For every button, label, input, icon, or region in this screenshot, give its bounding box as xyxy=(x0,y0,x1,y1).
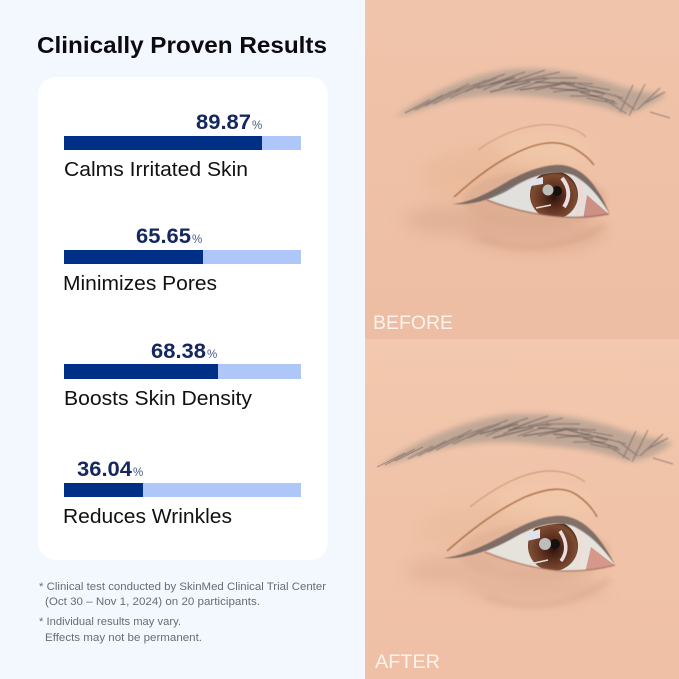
label: after: AFTER xyxy=(375,651,440,673)
result: minimizes pores xyxy=(63,225,301,295)
eyelid creases xyxy=(447,471,597,551)
value: 65.65%: % xyxy=(192,234,202,246)
eyebrow xyxy=(395,69,670,118)
bar: 89.87 percent xyxy=(64,136,301,150)
bar: 68.38 percent xyxy=(64,364,301,379)
footnotes: (Oct 30 – Nov 1, 2024) on 20 participants. xyxy=(45,596,260,608)
value: 65.65%: 65.65 xyxy=(136,225,191,248)
label: calms irritated skin: Calms Irritated Skin xyxy=(64,159,248,181)
footnotes: Effects may not be permanent. xyxy=(45,632,202,644)
eye xyxy=(443,516,617,581)
bar: 65.65 percent xyxy=(64,250,301,264)
value: 89.87%: % xyxy=(252,120,262,132)
result: reduces wrinkles xyxy=(63,458,301,528)
title: Clinically Proven Results xyxy=(37,32,327,58)
footnotes xyxy=(39,581,326,644)
value: 89.87%: 89.87 xyxy=(196,111,251,134)
photo: before xyxy=(365,0,679,339)
eyelid creases xyxy=(454,125,594,197)
value: 68.38%: % xyxy=(207,349,217,361)
value: 36.04%: 36.04 xyxy=(77,458,132,481)
photo: after xyxy=(365,339,679,679)
eyelid and under-eye shading xyxy=(415,559,610,608)
label: before: BEFORE xyxy=(373,312,453,334)
left panel background xyxy=(0,0,365,679)
footnotes: * Individual results may vary. xyxy=(39,616,181,628)
label: reduces wrinkles: Reduces Wrinkles xyxy=(63,506,232,528)
footnotes: * Clinical test conducted by SkinMed Clinical Trial Center xyxy=(39,581,326,593)
value: 36.04%: % xyxy=(133,467,143,479)
value: 68.38%: 68.38 xyxy=(151,340,206,363)
eye xyxy=(453,164,610,220)
result: calms irritated skin xyxy=(64,111,301,181)
bar: 36.04 percent xyxy=(64,483,301,497)
eyelid and under-eye shading xyxy=(412,153,606,253)
eyebrow xyxy=(377,414,673,467)
label: boosts skin density: Boosts Skin Density xyxy=(64,388,252,410)
label: minimizes pores: Minimizes Pores xyxy=(63,273,217,295)
panel: results card xyxy=(38,77,328,560)
result: boosts skin density xyxy=(64,340,301,410)
